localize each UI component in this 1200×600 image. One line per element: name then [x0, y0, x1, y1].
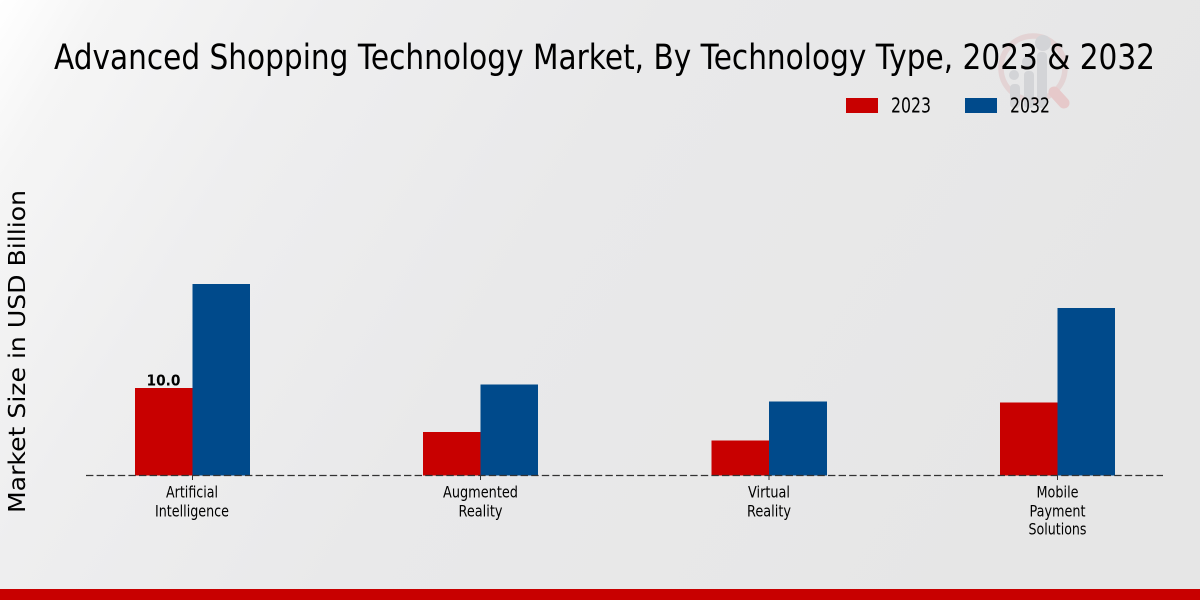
- label: Mobile Payment Solutions: Solutions: [1028, 520, 1086, 538]
- legend swatch: 2032: [965, 98, 997, 113]
- bar chart: [135, 284, 1115, 476]
- group: Augmented Reality: [423, 384, 538, 476]
- group: Artificial Intelligence: [135, 284, 250, 476]
- legend label: 2023: 2023: [891, 94, 931, 118]
- label: Mobile Payment Solutions: Mobile: [1036, 482, 1078, 502]
- label: Augmented Reality: Augmented: [443, 482, 518, 502]
- group: Mobile Payment Solutions: [1000, 308, 1115, 476]
- label: Artificial Intelligence: [155, 482, 229, 520]
- group: Virtual Reality: [712, 402, 827, 476]
- label: Augmented Reality: [443, 482, 518, 520]
- bottom red band: [0, 589, 1200, 600]
- watermark logo: [1001, 35, 1065, 108]
- x labels: [155, 482, 1086, 538]
- legend label: 2032: 2032: [1010, 94, 1050, 118]
- label: Artificial Intelligence: Intelligence: [155, 502, 229, 520]
- legend swatch: 2023: [846, 98, 878, 113]
- label: Augmented Reality: Reality: [458, 502, 502, 520]
- y axis label: Market Size in USD Billion: [5, 190, 31, 513]
- legend: [846, 94, 1050, 118]
- label: Virtual Reality: Virtual: [748, 482, 790, 502]
- data label: 10.0: [146, 372, 180, 390]
- x axis baseline: [86, 474, 1163, 476]
- label: Artificial Intelligence: Artificial: [166, 482, 218, 502]
- label: Virtual Reality: [747, 482, 791, 520]
- label: Virtual Reality: Reality: [747, 502, 791, 520]
- label: Mobile Payment Solutions: Payment: [1030, 502, 1086, 520]
- label: Mobile Payment Solutions: [1028, 482, 1086, 538]
